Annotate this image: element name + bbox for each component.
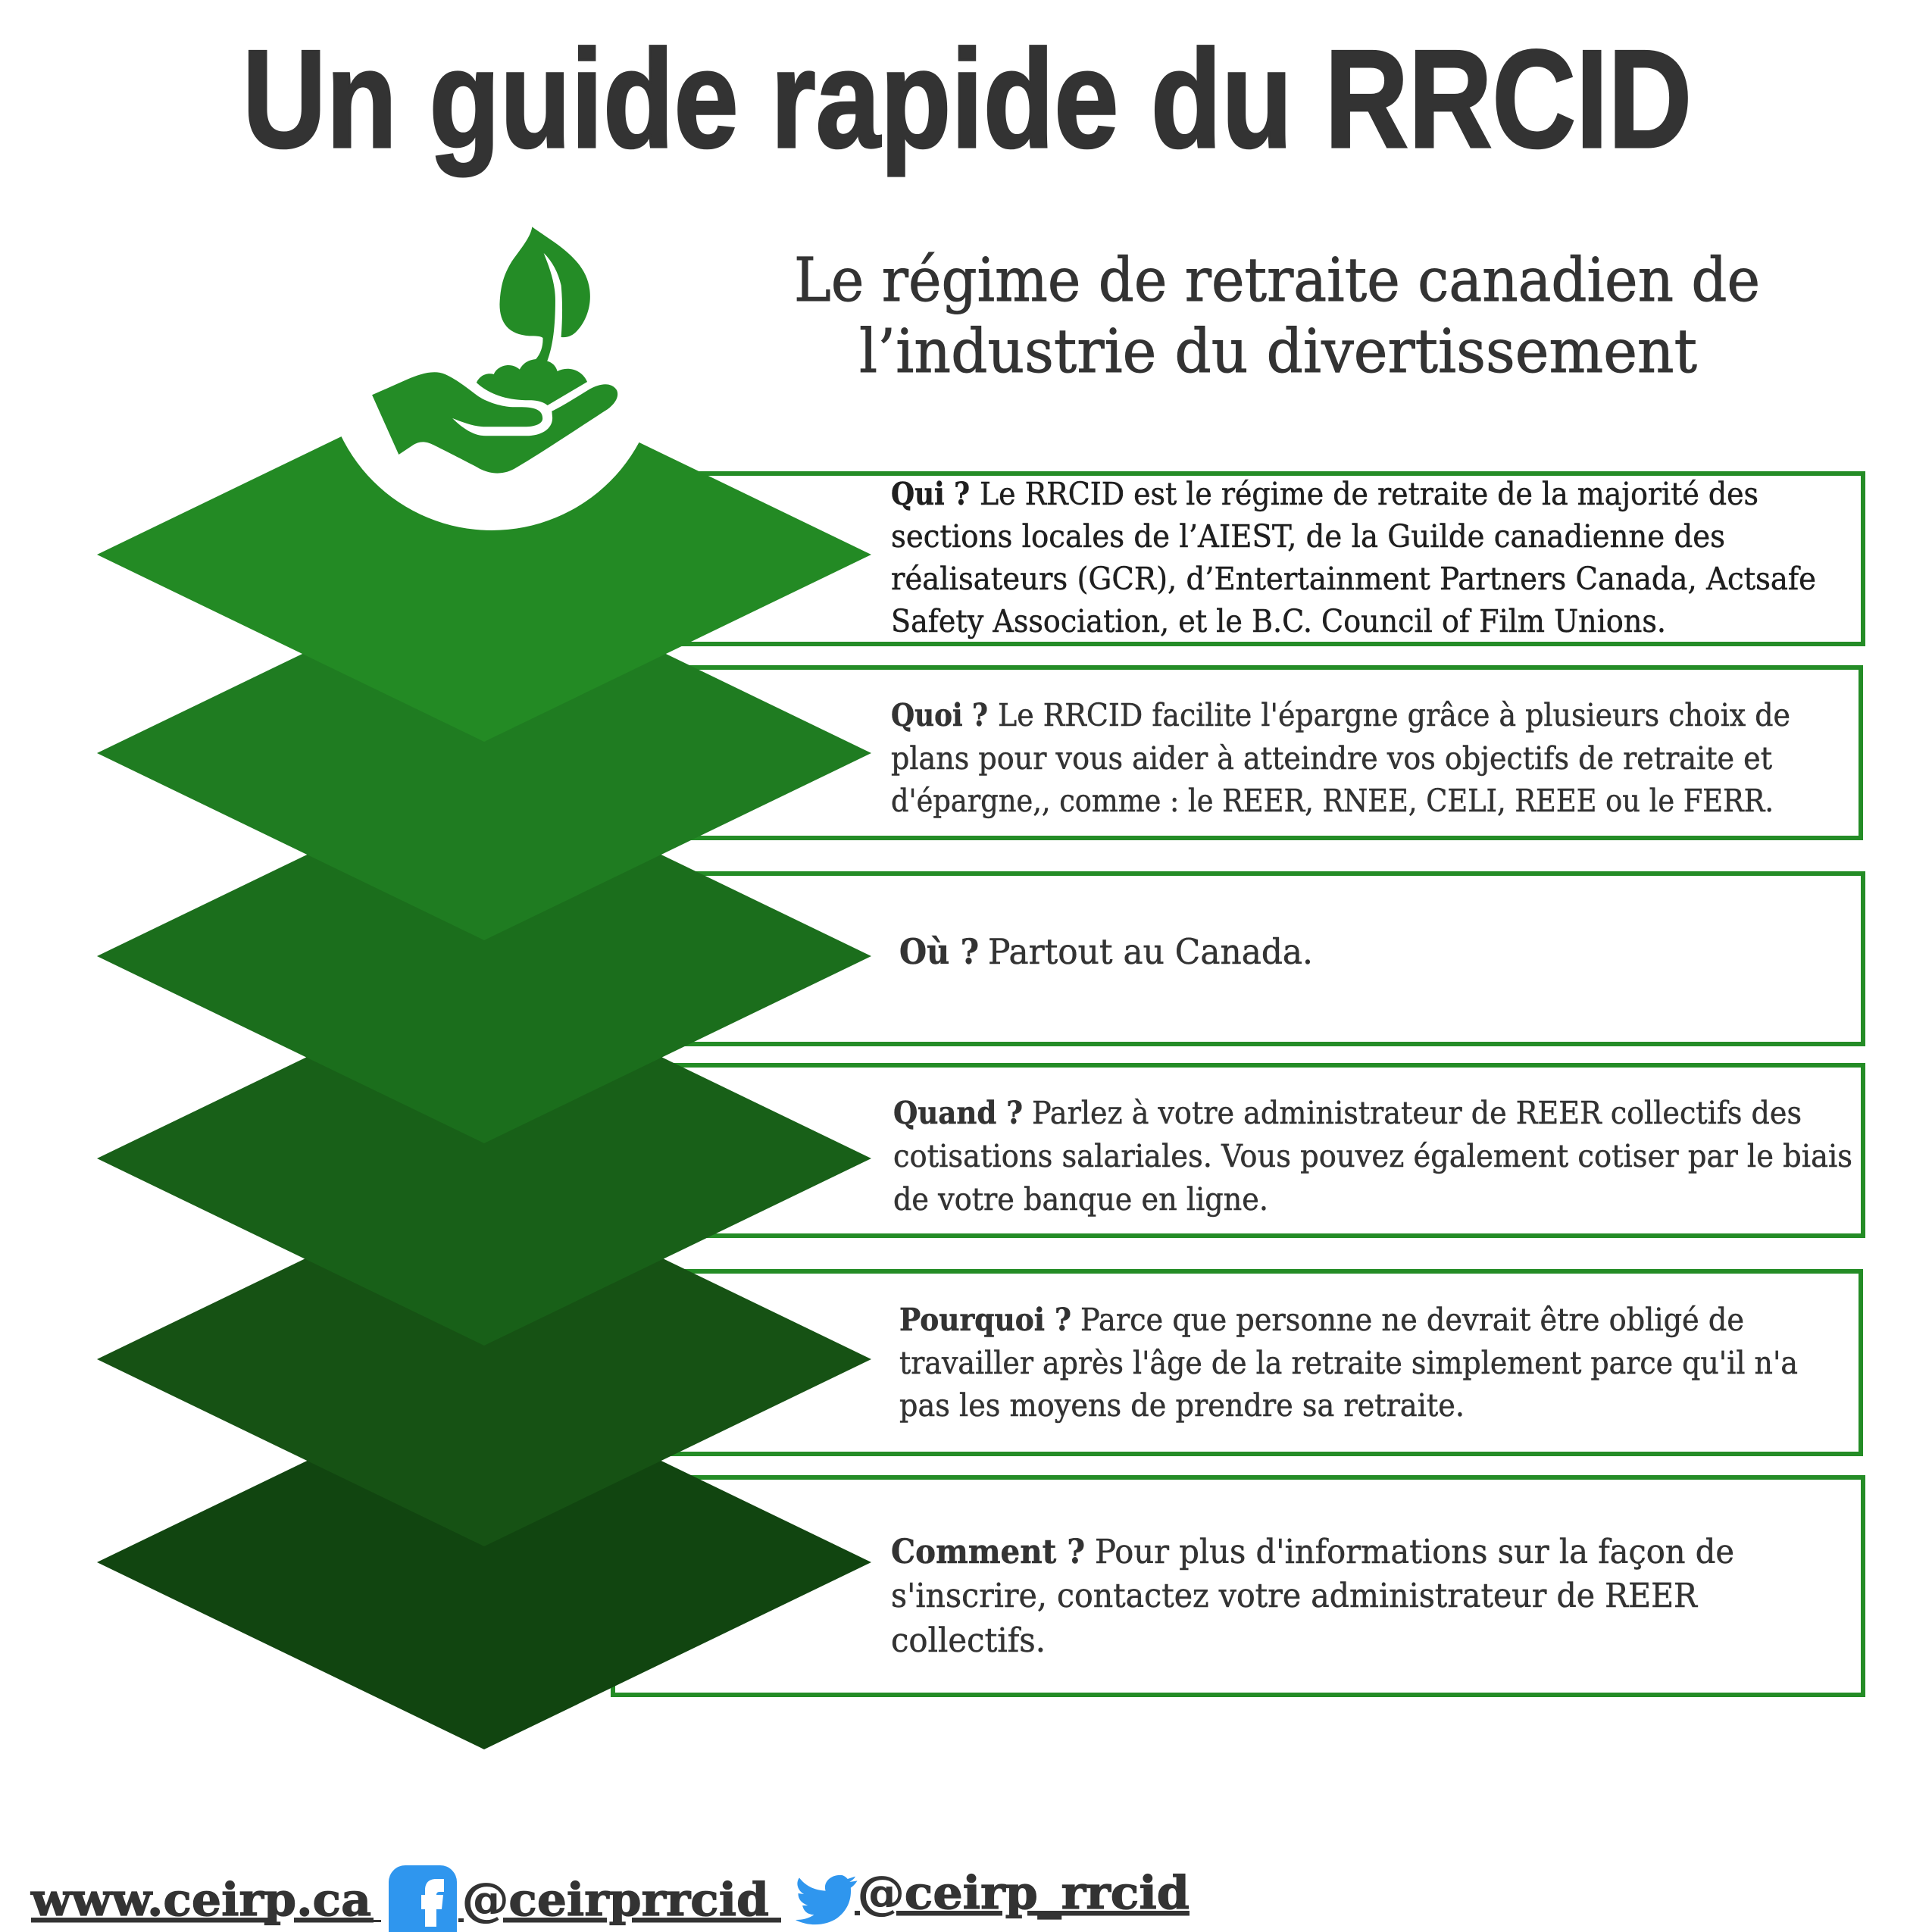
text: Pourquoi: Pourquoi ?	[899, 1302, 1071, 1338]
text: Quand: cotisations salariales. Vous pouvez également cotiser par le biais	[893, 1138, 1852, 1174]
text: Pourquoi: travailler après l'âge de la retraite simplement parce qu'il n'a	[899, 1345, 1798, 1381]
footer: twitter handle: @ceirp_rrcid	[858, 1867, 1190, 1920]
panel: Qui	[611, 474, 1863, 644]
subtitle	[794, 245, 1760, 386]
text: Où: Partout au Canada.	[988, 931, 1313, 972]
text: Quoi	[891, 697, 1790, 819]
text: Comment: Comment ?	[891, 1533, 1085, 1571]
text: Quand: Quand ?	[893, 1095, 1023, 1131]
layer 6	[97, 1375, 871, 1749]
frame: Quand	[611, 1065, 1863, 1236]
panel: Pourquoi	[611, 1271, 1861, 1454]
panel: Comment	[613, 1477, 1863, 1695]
panel: Quoi	[611, 667, 1861, 838]
stacked diamond layers	[97, 195, 871, 1749]
subtitle: Le régime de retraite canadien de	[794, 245, 1760, 315]
frame: Quoi	[611, 667, 1861, 838]
text: Pourquoi	[899, 1302, 1798, 1424]
layer 1	[97, 367, 871, 742]
text: Qui: sections locales de l’AIEST, de la Guilde canadienne des	[891, 518, 1725, 555]
layer 5	[97, 1172, 871, 1546]
icon: seedling and soil	[477, 227, 590, 405]
text: Quoi: Le RRCID facilite l'épargne grâce à plusieurs choix de	[998, 697, 1790, 733]
footer: facebook handle: @ceirprrcid	[462, 1874, 769, 1927]
icon: hand	[372, 372, 617, 474]
text: Pourquoi: Parce que personne ne devrait être obligé de	[1080, 1302, 1744, 1338]
icon: twitter bird	[796, 1875, 858, 1924]
layer 3	[97, 769, 871, 1143]
text: Où: Où ?	[899, 931, 979, 972]
text: Qui	[891, 476, 1816, 639]
panel: Où	[611, 874, 1863, 1044]
layer 4	[97, 971, 871, 1346]
text: Quand: de votre banque en ligne.	[893, 1181, 1268, 1218]
text: Comment: Pour plus d'informations sur la façon de	[1095, 1533, 1734, 1571]
frame: Comment	[613, 1477, 1863, 1695]
icon: hand holding seedling	[372, 227, 617, 474]
frame: Où	[611, 874, 1863, 1044]
text: Qui: Qui ?	[891, 476, 970, 512]
text: Comment: s'inscrire, contactez votre administrateur de REER	[891, 1577, 1699, 1615]
frame: Qui	[611, 474, 1863, 644]
layer 2	[97, 566, 871, 940]
text: Quand: Parlez à votre administrateur de REER collectifs des	[1032, 1095, 1802, 1131]
text: Comment	[891, 1533, 1734, 1660]
icon: facebook	[389, 1865, 457, 1932]
text: Quoi: plans pour vous aider à atteindre vos objectifs de retraite et	[891, 740, 1772, 777]
text: Quand	[893, 1095, 1852, 1218]
white circle cut-out	[324, 195, 659, 530]
text: Qui: Safety Association, et le B.C. Council of Film Unions.	[891, 603, 1666, 639]
text: Qui: réalisateurs (GCR), d’Entertainment Partners Canada, Actsafe	[891, 561, 1816, 597]
subtitle: l’industrie du divertissement	[859, 316, 1697, 386]
text: Comment: collectifs.	[891, 1621, 1046, 1660]
text: Pourquoi: pas les moyens de prendre sa retraite.	[899, 1387, 1465, 1424]
text: Qui: Le RRCID est le régime de retraite de la majorité des	[980, 476, 1758, 512]
text: Quoi: Quoi ?	[891, 697, 988, 733]
text: Quoi: d'épargne,, comme : le REER, RNEE, CELI, REEE ou le FERR.	[891, 783, 1774, 819]
panel: Quand	[611, 1065, 1863, 1236]
frame: Pourquoi	[611, 1271, 1861, 1454]
footer: website: www.ceirp.ca	[30, 1874, 371, 1927]
